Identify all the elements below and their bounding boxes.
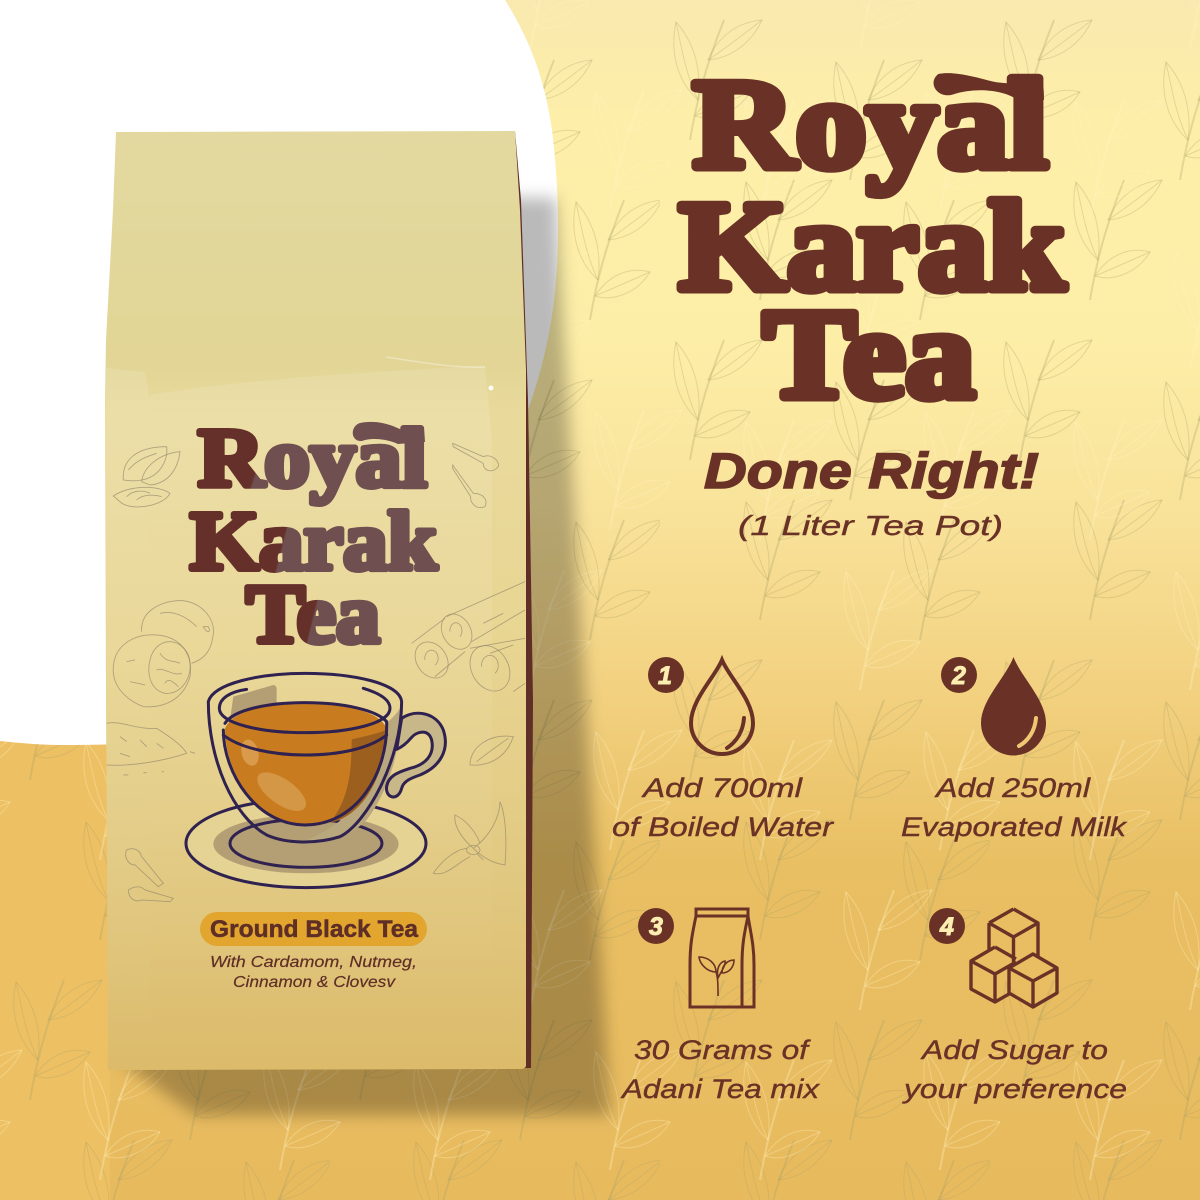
lower left gold area xyxy=(0,700,110,1200)
step 3 text: Adani Tea mix xyxy=(620,1074,821,1104)
cup glass shading xyxy=(230,685,277,720)
nutmeg doodle xyxy=(113,601,213,707)
badge 4: 4 xyxy=(939,913,954,941)
step 1 xyxy=(612,657,834,842)
bag gloss highlights xyxy=(106,357,494,1060)
title Karak: Karak xyxy=(679,175,1065,317)
ground spice doodle xyxy=(107,723,195,775)
badge 1: 1 xyxy=(658,662,672,690)
step 1 text: of Boiled Water xyxy=(612,812,834,842)
bag description xyxy=(210,954,417,991)
icon: water drop xyxy=(691,660,753,754)
icon: sugar cubes xyxy=(971,909,1057,1007)
ground black tea pill: Ground Black Tea xyxy=(210,916,419,943)
main title xyxy=(679,53,1065,425)
step 1 text xyxy=(612,773,834,842)
bag swash on Royal xyxy=(353,422,425,444)
step 3 xyxy=(620,908,821,1104)
title Royal: Royal xyxy=(693,53,1048,195)
cardamom doodle xyxy=(113,447,180,507)
step 4 text: your preference xyxy=(902,1074,1127,1104)
bag front face xyxy=(105,131,526,1070)
bag description: Cinnamon & Clovesv xyxy=(233,974,396,991)
clove doodles xyxy=(453,443,498,508)
step 4 text xyxy=(902,1035,1127,1104)
saucer xyxy=(186,799,426,888)
badge 3: 3 xyxy=(649,913,663,941)
bag side gusset xyxy=(515,131,533,1068)
step 2 text: Add 250ml xyxy=(934,773,1091,803)
spice doodles top xyxy=(113,443,525,707)
product bag xyxy=(105,131,533,1070)
badge 1 xyxy=(648,657,684,693)
tea cup illustration xyxy=(186,673,445,888)
badge 3 xyxy=(638,908,674,944)
step 2 xyxy=(901,657,1128,842)
bag drop shadow xyxy=(120,198,610,1115)
clove doodles lower xyxy=(126,849,173,902)
bag text Tea: Tea xyxy=(246,568,380,661)
bag wordmark xyxy=(190,412,437,661)
icon: milk drop xyxy=(981,657,1046,756)
bag text Royal: Royal xyxy=(198,412,427,505)
subtitle tea pot: (1 Liter Tea Pot) xyxy=(738,510,1003,541)
cardamom pod doodle xyxy=(470,736,513,765)
bag text Karak: Karak xyxy=(190,495,437,588)
bag description: With Cardamom, Nutmeg, xyxy=(210,954,417,971)
title Tea: Tea xyxy=(763,283,975,425)
cup outlines xyxy=(208,673,402,842)
spice doodles bottom xyxy=(107,723,513,902)
mint doodle xyxy=(433,802,506,874)
step 3 text: 30 Grams of xyxy=(634,1035,811,1065)
step 1 text: Add 700ml xyxy=(641,773,803,803)
cinnamon doodle xyxy=(408,582,525,698)
white blob background xyxy=(0,0,558,745)
icon: tea bag xyxy=(690,909,754,1007)
tea shading and highlights xyxy=(238,728,387,823)
step 4 text: Add Sugar to xyxy=(920,1035,1108,1065)
handle xyxy=(386,713,445,797)
title swash xyxy=(934,73,1044,102)
step 2 text xyxy=(901,773,1128,842)
tea liquid xyxy=(225,704,387,825)
step 3 text xyxy=(620,1035,821,1104)
badge 4 xyxy=(929,908,965,944)
step 4 xyxy=(902,908,1127,1104)
subtitle done right: Done Right! xyxy=(704,443,1039,499)
badge 2 xyxy=(941,657,977,693)
badge 2: 2 xyxy=(951,662,966,690)
step 2 text: Evaporated Milk xyxy=(901,812,1128,842)
